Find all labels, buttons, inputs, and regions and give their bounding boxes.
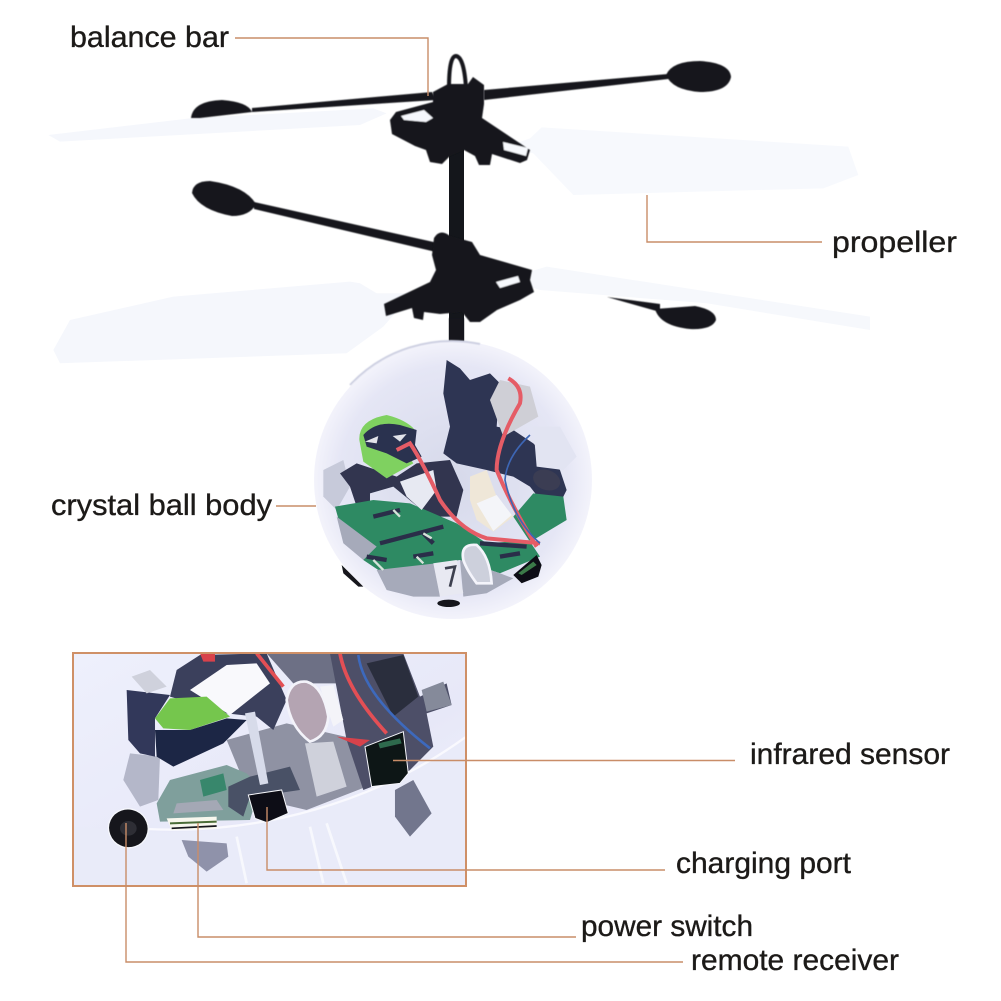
transparent dome bbox=[533, 427, 577, 470]
propeller blade: lower right bbox=[525, 267, 870, 330]
bottom port bbox=[437, 600, 460, 607]
clear clip top left bbox=[132, 670, 167, 693]
clear sphere bbox=[314, 341, 592, 619]
leader line: crystal ball body bbox=[276, 505, 316, 507]
upper hub body bbox=[390, 77, 530, 165]
label: crystal ball body: crystal ball body bbox=[51, 489, 272, 522]
charging port bbox=[248, 790, 288, 823]
circuit board bbox=[157, 765, 260, 822]
inset background bbox=[73, 653, 466, 886]
lower mast bbox=[449, 318, 464, 348]
blade root bbox=[503, 142, 528, 156]
hub loop bbox=[449, 56, 466, 88]
dark tab on lower right bbox=[395, 780, 432, 837]
label: infrared sensor: infrared sensor bbox=[750, 738, 950, 771]
white strip on hoop bbox=[320, 685, 343, 727]
label: balance bar: balance bar bbox=[70, 21, 229, 54]
board details bbox=[367, 510, 527, 560]
dark upper right block bbox=[367, 655, 418, 717]
dark frame left bbox=[340, 460, 463, 517]
capacitor bbox=[530, 466, 563, 494]
shadow below shell bbox=[182, 840, 228, 872]
central mast bbox=[449, 100, 464, 345]
inset internals bbox=[74, 653, 465, 885]
blue wire bbox=[505, 435, 540, 543]
label: charging port: charging port bbox=[676, 847, 851, 880]
clear hoop bbox=[287, 682, 328, 742]
propeller blade: upper right bbox=[507, 127, 858, 195]
board dark chips bbox=[228, 767, 300, 817]
lower right gap bbox=[496, 276, 520, 288]
clear tube bbox=[245, 712, 268, 785]
infrared sensor bbox=[513, 555, 542, 583]
label: remote receiver: remote receiver bbox=[691, 944, 899, 977]
dark block left bbox=[127, 690, 170, 757]
blue wire bbox=[358, 655, 430, 748]
right dark region bbox=[330, 653, 452, 790]
infrared sensor bbox=[365, 732, 408, 787]
lighter vertical streaks bbox=[237, 823, 347, 883]
leader line: propeller bbox=[647, 195, 822, 242]
pale facets bbox=[323, 460, 350, 510]
grey block right bbox=[422, 682, 452, 712]
green battery wrap bbox=[359, 415, 415, 478]
ball internals bbox=[323, 360, 577, 607]
dark battery block bbox=[155, 718, 247, 767]
grey middle plastic bbox=[227, 723, 367, 810]
battery clips bbox=[365, 434, 407, 443]
shell below seam bbox=[74, 737, 465, 885]
leader line: balance bar bbox=[235, 38, 428, 96]
clear light pipe bbox=[305, 742, 347, 797]
propeller blade: lower left bbox=[53, 282, 407, 363]
label: propeller: propeller bbox=[832, 226, 957, 259]
inset border bbox=[73, 653, 466, 886]
helicopter rotors bbox=[48, 56, 870, 363]
remote receiver bbox=[102, 802, 155, 854]
power switch tab bbox=[433, 560, 463, 597]
label: power switch: power switch bbox=[581, 910, 753, 943]
lower hub body bbox=[384, 232, 534, 322]
LED cube bbox=[470, 470, 513, 532]
inset close-up photo bbox=[73, 653, 466, 886]
leader line: charging port bbox=[267, 807, 665, 870]
balance bar: lower bbox=[192, 181, 716, 329]
top dark frame bbox=[170, 653, 287, 730]
dark inner frame bbox=[443, 360, 567, 517]
black foot on shell bbox=[342, 565, 363, 587]
red wire bbox=[397, 378, 540, 547]
white sticker bbox=[190, 663, 270, 715]
clear capsule bbox=[490, 380, 538, 437]
upper hub bbox=[390, 56, 530, 165]
white shell seam bbox=[147, 737, 465, 830]
top centre grey bbox=[267, 653, 350, 683]
propeller blade: upper left bbox=[48, 108, 387, 142]
balance bar: upper bbox=[191, 61, 731, 118]
grey lower components bbox=[337, 517, 513, 597]
red wires bbox=[257, 653, 387, 733]
crystal ball body bbox=[314, 341, 592, 619]
soft haze around board bbox=[123, 753, 160, 807]
leader line: remote receiver bbox=[126, 823, 683, 962]
sphere rim highlight bbox=[350, 341, 480, 385]
power switch bbox=[167, 817, 217, 830]
green battery bbox=[155, 697, 230, 730]
green board bbox=[335, 493, 567, 573]
hub window bbox=[401, 110, 433, 122]
leader line: power switch bbox=[198, 823, 576, 937]
white cube near wire bbox=[400, 470, 437, 510]
leader line: infrared sensor bbox=[393, 760, 735, 762]
lower hub bbox=[384, 232, 534, 348]
clear hoop bbox=[463, 545, 492, 583]
dark battery body bbox=[363, 424, 422, 463]
